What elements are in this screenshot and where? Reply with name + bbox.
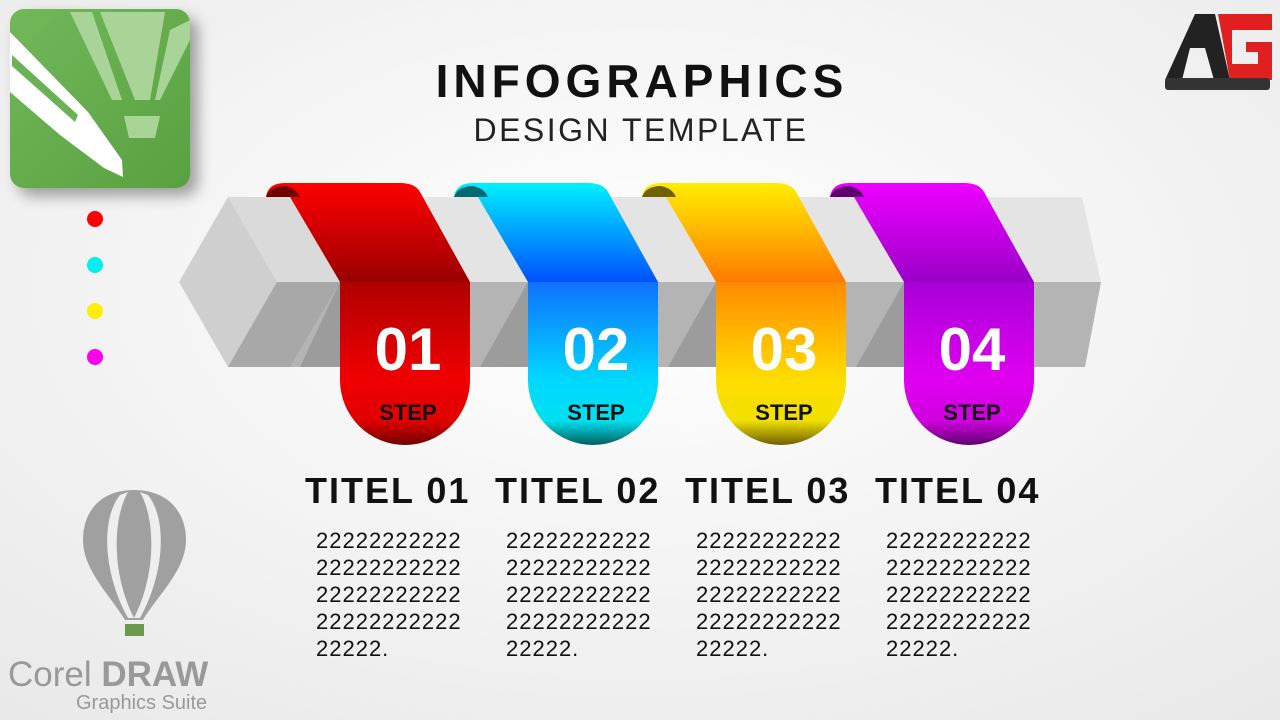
column 4 text: 22222222222 (886, 555, 1032, 580)
column 4 text: 22222222222 (886, 582, 1032, 607)
step 04 ribbon (830, 183, 1034, 445)
column 3 text: TITEL 03 (685, 470, 850, 511)
column 2 text: 22222222222 (506, 609, 652, 634)
column 2 text (495, 470, 660, 661)
step 01 ribbon: STEP (379, 400, 437, 425)
column 4 text: 22222222222 (886, 609, 1032, 634)
step 03 ribbon: STEP (755, 400, 813, 425)
step 02 ribbon: 02 (563, 316, 629, 383)
legend dots (87, 211, 103, 365)
title: DESIGN TEMPLATE (473, 112, 809, 148)
column 1 text: 22222222222 (316, 609, 462, 634)
column 3 text: 22222222222 (696, 555, 842, 580)
CorelDRAW wordmark: Corel DRAW (8, 655, 208, 694)
step 03 ribbon (642, 183, 846, 445)
column 2 text: TITEL 02 (495, 470, 660, 511)
step 02 ribbon (454, 183, 658, 445)
icon: CorelDRAW app logo (10, 9, 190, 188)
CorelDRAW wordmark: Graphics Suite (76, 692, 207, 714)
CorelDRAW wordmark (8, 655, 208, 714)
column 3 text: 22222. (696, 636, 769, 661)
step 01 ribbon (266, 183, 470, 445)
step 01 ribbon: 01 (375, 316, 441, 383)
column 4 text: 22222. (886, 636, 959, 661)
step 03 ribbon: 03 (751, 316, 817, 383)
column 1 text: TITEL 01 (305, 470, 470, 511)
3D bar (179, 197, 1101, 367)
column 1 text: 22222222222 (316, 555, 462, 580)
title: INFOGRAPHICS (436, 55, 848, 107)
column 2 text: 22222222222 (506, 555, 652, 580)
column 4 text: 22222222222 (886, 528, 1032, 553)
step 04 ribbon: STEP (943, 400, 1001, 425)
title (436, 55, 848, 148)
column 2 text: 22222222222 (506, 582, 652, 607)
column 3 text (685, 470, 850, 661)
column 3 text: 22222222222 (696, 609, 842, 634)
step 04 ribbon: 04 (939, 316, 1006, 383)
column 1 text: 22222222222 (316, 582, 462, 607)
column 2 text: 22222222222 (506, 528, 652, 553)
column 2 text: 22222. (506, 636, 579, 661)
column 4 text: TITEL 04 (875, 470, 1040, 511)
CorelDRAW balloon logo (83, 490, 186, 636)
step 02 ribbon: STEP (567, 400, 625, 425)
column 1 text: 22222222222 (316, 528, 462, 553)
column 1 text: 22222. (316, 636, 389, 661)
column 3 text: 22222222222 (696, 582, 842, 607)
icon: AG logo (1165, 14, 1272, 90)
column 4 text (875, 470, 1040, 661)
column 3 text: 22222222222 (696, 528, 842, 553)
column 1 text (305, 470, 470, 661)
